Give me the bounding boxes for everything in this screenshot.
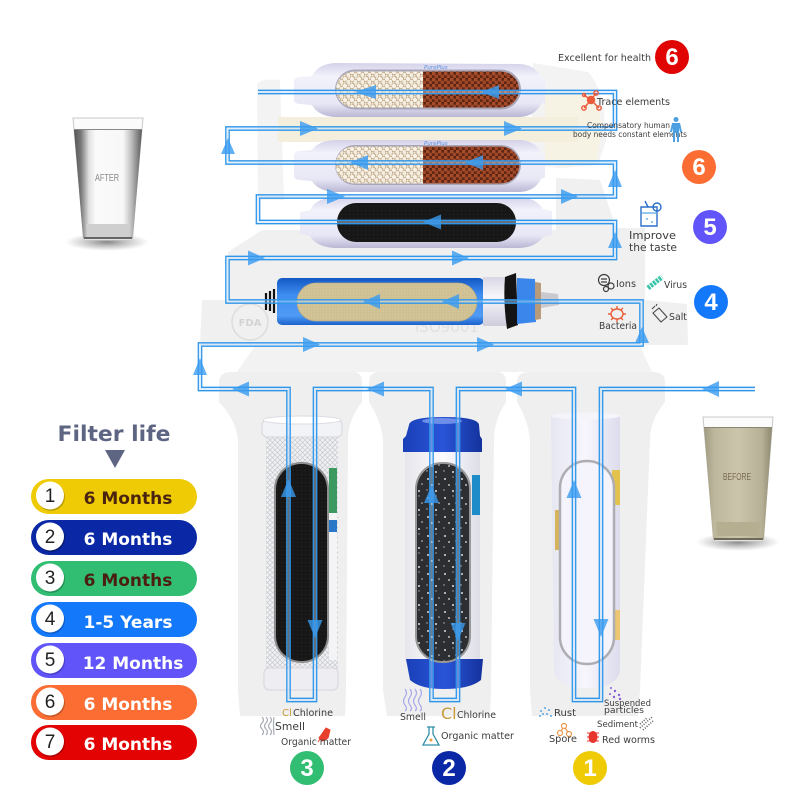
legend row 6: 6 Months	[84, 695, 172, 715]
glass of raw water: BEFORE	[696, 417, 780, 551]
legend row 5: 5	[45, 650, 55, 671]
label: Chlorine stage 2: Chlorine	[457, 710, 496, 721]
label: Compensatory human body needs constant elements	[573, 121, 687, 139]
filter 6: second mineral cartridge: PurePlus	[424, 141, 448, 147]
label: Virus: Virus	[664, 280, 687, 291]
icon: salt	[652, 304, 667, 322]
filter 1: PP sediment cartridge	[551, 412, 620, 688]
icon: sediment dots	[640, 717, 653, 730]
badge: stage 4	[694, 285, 728, 319]
heading: Filter life: Filter life	[58, 422, 170, 446]
label: Compensatory human body needs constant elements: body needs constant elements	[573, 130, 687, 139]
badge: stage 2: 2	[442, 755, 456, 782]
icon: red worm bug	[587, 731, 599, 743]
legend row 3: 3	[45, 568, 55, 589]
legend row 5	[31, 643, 197, 678]
icon: organic matter dropper	[318, 728, 330, 742]
label: Chlorine for stage 3: Cl	[282, 708, 292, 719]
glass of filtered water: AFTER: AFTER	[95, 172, 119, 184]
label: Ions: Ions	[616, 279, 636, 290]
label: Suspended particles: Suspended	[604, 699, 651, 709]
icon: spore	[558, 724, 572, 736]
legend row 6	[31, 685, 197, 720]
legend row 7: 7	[45, 732, 55, 753]
icon: smell waves stage 2	[404, 689, 422, 711]
faded machine background: ISO9001	[415, 318, 479, 336]
legend row 7	[31, 725, 197, 760]
legend row 1: 6 Months	[84, 489, 172, 509]
faded machine background: FDA	[239, 318, 262, 329]
icon: trace elements molecule	[582, 91, 601, 110]
legend row 2	[31, 520, 197, 555]
icon: smell waves stage 3	[260, 717, 274, 735]
legend row 4: 4	[45, 609, 56, 630]
badge: stage 1	[573, 751, 607, 785]
label: Bacteria: Bacteria	[599, 321, 637, 332]
badge: stage 6 red: 6	[665, 44, 679, 71]
label: Smell stage 2: Smell	[400, 712, 426, 723]
icon: drink glass	[641, 201, 661, 226]
badge: stage 6 orange	[682, 150, 716, 184]
badge: stage 4: 4	[704, 289, 718, 316]
label: Improve the taste: Improve	[629, 229, 676, 242]
label: Chlorine stage 2	[441, 704, 496, 723]
legend row 1	[31, 479, 197, 514]
label: Sediment: Sediment	[597, 720, 639, 730]
filter 6: second mineral cartridge	[294, 140, 545, 192]
filter 3: carbon block cartridge	[262, 416, 342, 690]
icon: down triangle	[105, 450, 125, 468]
label: Smell stage 3: Smell	[275, 721, 305, 733]
label: Suspended particles	[604, 699, 651, 716]
badge: stage 5: 5	[703, 214, 717, 241]
badge: stage 2	[432, 751, 466, 785]
label: Improve the taste: the taste	[629, 241, 677, 254]
label: Spore: Spore	[549, 734, 577, 745]
icon: rust dots	[539, 707, 552, 717]
icon: suspended particles	[609, 687, 621, 700]
legend row 4	[31, 602, 197, 637]
badge: stage 6 red	[655, 40, 689, 74]
badge: stage 5	[693, 210, 727, 244]
filter 7: top mineral cartridge: PurePlus	[424, 65, 448, 71]
glass of raw water: BEFORE: BEFORE	[723, 471, 751, 483]
label: Excellent for health: Excellent for health	[558, 53, 651, 64]
filter 2: granular carbon cartridge	[403, 417, 483, 689]
badge: stage 1: 1	[583, 755, 597, 782]
badge: stage 3	[290, 751, 324, 785]
label: Trace elements: Trace elements	[596, 97, 670, 108]
faded machine background	[200, 63, 688, 372]
legend row 2: 2	[45, 527, 55, 548]
icon: membrane left coil	[266, 289, 274, 313]
legend row 5: 12 Months	[83, 654, 183, 674]
flow arrows	[193, 85, 719, 641]
legend row 1: 1	[45, 486, 55, 507]
legend row 2: 6 Months	[84, 530, 172, 550]
label: Improve the taste	[629, 229, 677, 254]
label: Rust: Rust	[554, 708, 576, 719]
filter life legend	[31, 422, 197, 760]
filter 7: top mineral cartridge	[294, 63, 545, 117]
water flow pipe lines	[198, 90, 755, 702]
icon: human figure	[670, 117, 682, 142]
filter 5: carbon post filter	[300, 197, 552, 248]
icon: bacteria	[608, 306, 626, 322]
legend row 7: 6 Months	[84, 735, 172, 755]
icon: ions	[598, 274, 614, 292]
legend row 6: 6	[45, 692, 55, 713]
label: Compensatory human body needs constant elements: Compensatory human	[587, 121, 670, 130]
label: Salt: Salt	[669, 312, 687, 323]
label: Chlorine stage 2: Cl	[441, 704, 457, 723]
label: Organic matter stage 2: Organic matter	[441, 731, 515, 742]
label: Red worms: Red worms	[602, 735, 655, 746]
glass of filtered water: AFTER	[65, 118, 149, 251]
icon: flask	[423, 727, 439, 745]
label: Suspended particles: particles	[604, 706, 645, 716]
legend row 3	[31, 561, 197, 596]
legend row 3: 6 Months	[84, 571, 172, 591]
label: Organic matter stage 3: Organic matter	[281, 737, 351, 748]
badge: stage 3: 3	[300, 755, 314, 782]
legend row 4: 1-5 Years	[84, 613, 172, 633]
badge: stage 6 orange: 6	[692, 154, 706, 181]
housings for the three lower filters	[219, 372, 665, 716]
icon: virus	[648, 277, 662, 288]
label: Chlorine for stage 3: Chlorine	[293, 708, 333, 719]
filter 4: RO membrane	[266, 273, 559, 329]
